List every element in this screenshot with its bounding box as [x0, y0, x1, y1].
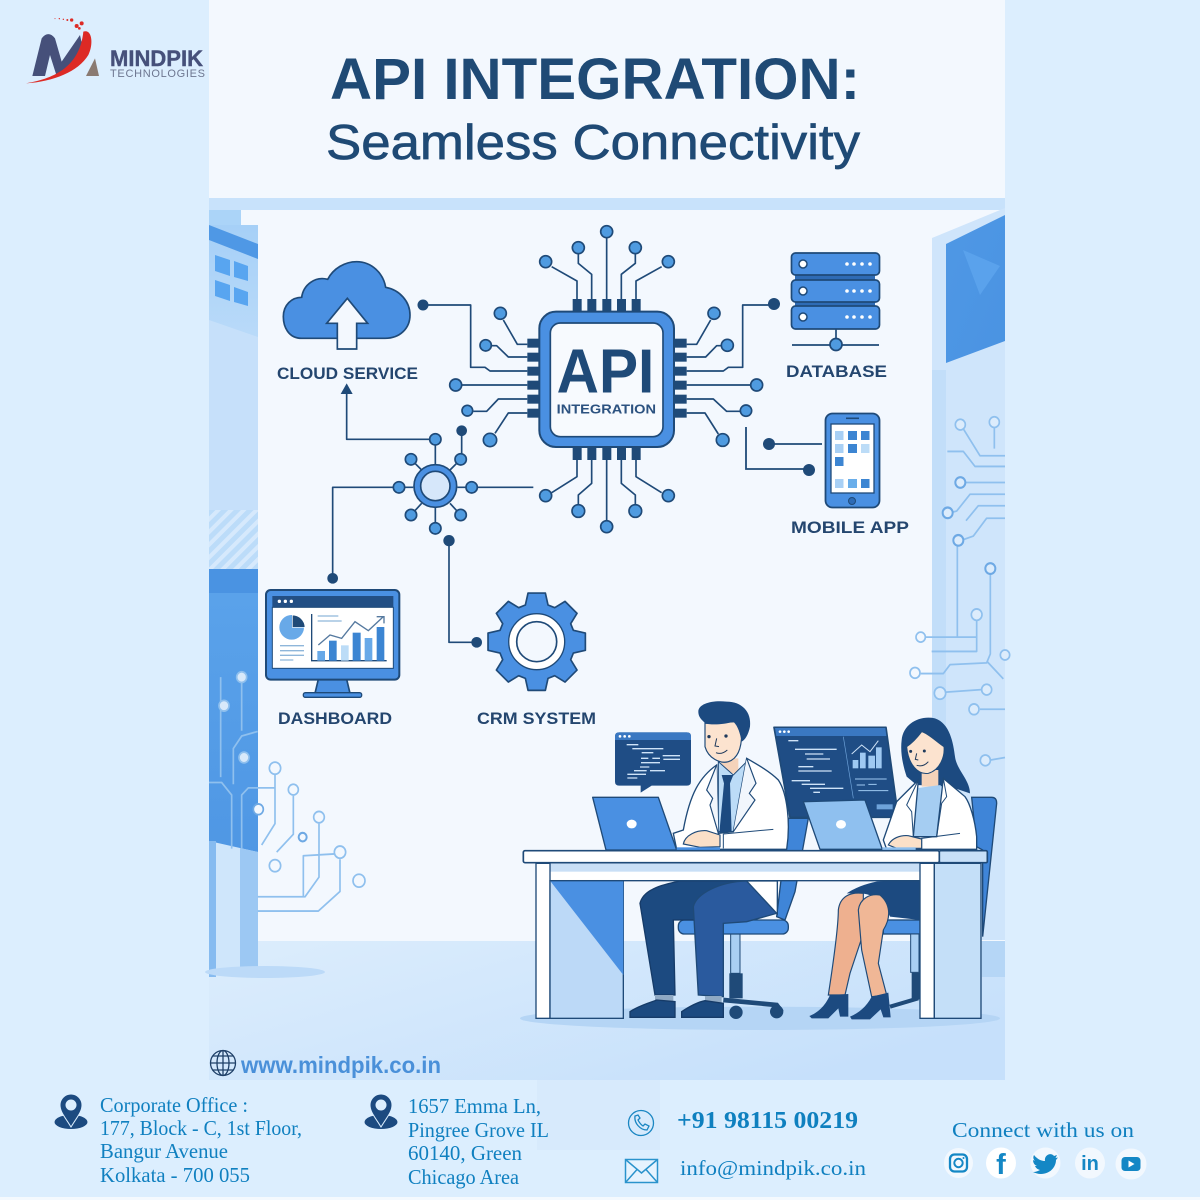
- large code monitor: [774, 727, 898, 817]
- icon: envelope: [626, 1160, 658, 1182]
- floor right block: [982, 941, 1005, 977]
- chip sublabel: INTEGRATION: [557, 401, 656, 416]
- icon: location pin: [54, 1094, 88, 1129]
- left building decoration: [205, 210, 325, 978]
- email address: info@mindpik.co.in: [680, 1156, 866, 1180]
- man: [630, 701, 788, 1017]
- phone contact: [628, 1108, 858, 1136]
- logo mark: [26, 18, 99, 83]
- icon: globe: [210, 1050, 236, 1076]
- address text: 60140, Green: [408, 1141, 522, 1165]
- right wall decoration: [932, 208, 1005, 940]
- footer tint block: [537, 1080, 660, 1150]
- header divider band: [209, 198, 1005, 210]
- chip body: [539, 312, 674, 447]
- website text: www.mindpik.co.in: [240, 1052, 441, 1078]
- social heading: Connect with us on: [952, 1118, 1134, 1142]
- title line 1: API INTEGRATION:: [330, 47, 860, 112]
- address text: Bangur Avenue: [100, 1139, 228, 1163]
- man's chair: [678, 818, 808, 1019]
- bottom edge strip: [0, 1197, 1200, 1200]
- woman's chair: [972, 797, 997, 937]
- chip label: API: [557, 337, 654, 406]
- central poster panel: [209, 0, 1005, 1080]
- corporate office address: [54, 1093, 302, 1187]
- desk: [523, 851, 987, 1018]
- cloud service: [277, 262, 418, 383]
- label: database: DATABASE: [786, 362, 887, 381]
- woman's legs: [809, 881, 920, 1019]
- hub wiring: [333, 390, 533, 642]
- address text: Chicago Area: [408, 1165, 519, 1189]
- mobile connector: [746, 427, 822, 476]
- woman's chair base: [883, 920, 920, 1007]
- connector dot: cloud: [418, 300, 428, 310]
- woman's laptop: [803, 800, 916, 851]
- chicago address: [364, 1094, 549, 1189]
- woman: [883, 718, 977, 849]
- hub nodes: [327, 425, 482, 648]
- address text: [100, 1093, 302, 1187]
- central API chip: [423, 226, 773, 533]
- website link: [210, 1050, 441, 1078]
- icon: facebook: f: [996, 1149, 1006, 1181]
- label: crm system: CRM SYSTEM: [477, 709, 596, 728]
- mobile app: [791, 414, 909, 537]
- title: [326, 47, 861, 170]
- logo: [26, 18, 205, 83]
- address text: Kolkata - 700 055: [100, 1163, 250, 1187]
- hub core: [414, 465, 457, 507]
- man's laptop: [593, 797, 720, 851]
- right circuit decoration: [910, 417, 1010, 766]
- label: mobile app: MOBILE APP: [791, 518, 909, 537]
- email contact: [626, 1156, 866, 1182]
- address text: [408, 1094, 549, 1189]
- label: cloud service: CLOUD SERVICE: [277, 364, 418, 383]
- chip pads: [527, 299, 687, 460]
- icon: phone: [826, 414, 880, 508]
- left circuit decoration: [209, 672, 365, 911]
- icon: facebook: [986, 1148, 1016, 1181]
- dashboard: [266, 590, 399, 728]
- icon: cloud: [283, 262, 410, 349]
- logo tagline: TECHNOLOGIES: [110, 68, 205, 80]
- icon: phone: [628, 1110, 654, 1136]
- floor shadow: [520, 1007, 1000, 1030]
- icon: instagram: [944, 1148, 973, 1178]
- connector dot: database: [768, 298, 780, 310]
- connector hub: [327, 383, 533, 648]
- developers at desk scene: [520, 701, 1000, 1030]
- floor: [209, 941, 1005, 1080]
- crm system: [477, 593, 596, 728]
- address text: Pingree Grove IL: [408, 1118, 549, 1142]
- address text: Corporate Office :: [100, 1093, 248, 1117]
- social links: [944, 1118, 1146, 1181]
- icon: twitter: [1030, 1148, 1060, 1178]
- icon: location pin: [364, 1094, 398, 1129]
- phone number: +91 98115 00219: [677, 1108, 858, 1134]
- icon: linkedin: [1075, 1148, 1105, 1178]
- icon: server stack: [792, 253, 880, 350]
- label: dashboard: DASHBOARD: [278, 709, 392, 728]
- chip nodes: [450, 226, 763, 533]
- icon: linkedin: in: [1081, 1153, 1099, 1175]
- address text: 177, Block - C, 1st Floor,: [100, 1116, 302, 1140]
- title line 2: Seamless Connectivity: [326, 116, 861, 170]
- icon: monitor: [266, 590, 399, 697]
- logo wordmark: MINDPIK: [110, 46, 203, 71]
- hub arrow head: [341, 383, 353, 394]
- icon: gear: [488, 593, 585, 690]
- database: [786, 253, 887, 381]
- chip traces: [423, 232, 773, 520]
- address text: 1657 Emma Ln,: [408, 1094, 541, 1118]
- icon: youtube: [1116, 1148, 1146, 1180]
- code speech bubble: [615, 732, 691, 793]
